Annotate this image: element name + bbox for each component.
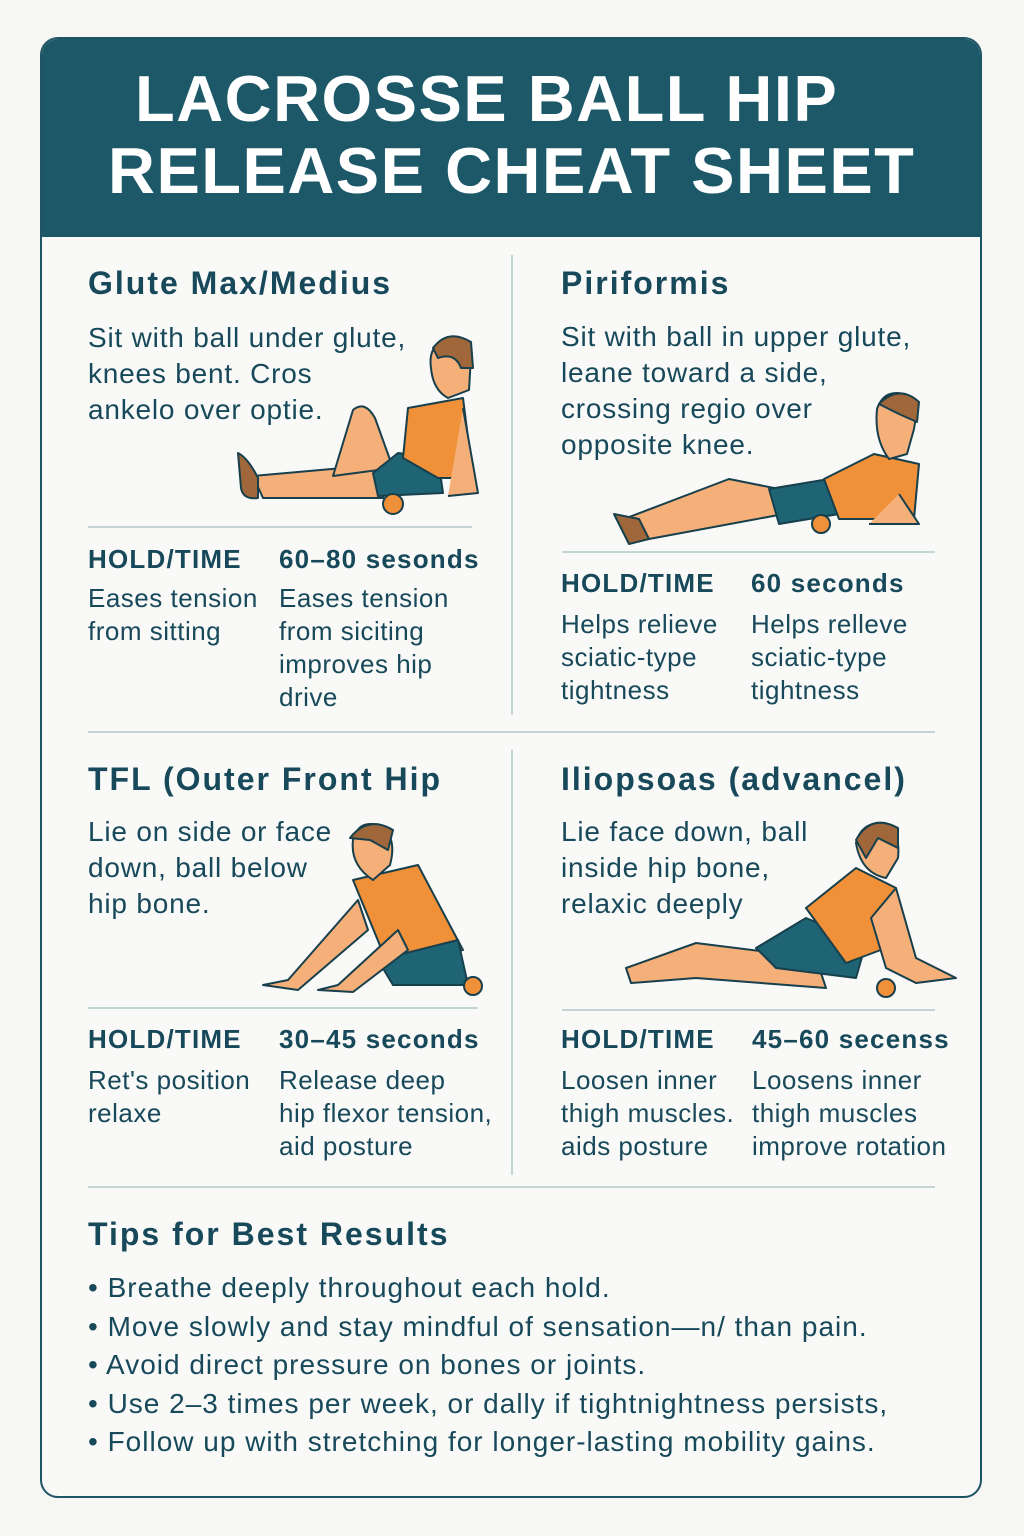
heading TFL: TFL (Outer Front Hip: [88, 761, 442, 797]
text glute: knees bent. Cros: [88, 358, 312, 389]
panel: TFL: Ret's position: [88, 1065, 250, 1095]
panel: glute: from sitting: [88, 616, 221, 646]
panel: piriformis: 60 seconds: [751, 568, 905, 598]
tips list: • Follow up with stretching for longer-lasting mobility gains.: [88, 1426, 876, 1457]
heading iliopsoas: Iliopsoas (advancel): [561, 761, 907, 797]
text piriformis: Sit with ball in upper glute,: [561, 321, 911, 352]
tips list: • Avoid direct pressure on bones or joints.: [88, 1349, 646, 1380]
icon: prone figure: [625, 822, 957, 998]
panel: piriformis: sciatic-type: [751, 642, 887, 672]
hold iliopsoas: HOLD/TIME: [561, 1024, 715, 1054]
panel: piriformis: tightness: [561, 675, 670, 705]
panel: iliopsoas: thigh muscles.: [561, 1098, 734, 1128]
tips heading: Tips for Best Results: [88, 1216, 449, 1252]
text piriformis: [561, 321, 911, 460]
icon: kneeling figure: [262, 823, 483, 996]
text piriformis: crossing regio over: [561, 393, 813, 424]
panel: glute: 60–80 sesonds: [279, 544, 480, 574]
panel: glute: [88, 265, 480, 712]
hold TFL: HOLD/TIME: [88, 1024, 242, 1054]
panel: piriformis: sciatic-type: [561, 642, 697, 672]
tips list: • Use 2–3 times per week, or dally if tightnightness persists,: [88, 1388, 888, 1418]
panel: iliopsoas: Loosen inner: [561, 1065, 717, 1095]
panel: iliopsoas: improve rotation: [752, 1131, 946, 1161]
panel: iliopsoas: 45–60 secenss: [752, 1024, 950, 1054]
panel: iliopsoas: [561, 761, 957, 1161]
panel: TFL: [88, 761, 492, 1161]
panel: TFL: relaxe: [88, 1098, 162, 1128]
title: RELEASE CHEAT SHEET: [108, 134, 915, 207]
panel: iliopsoas: thigh muscles: [752, 1098, 917, 1128]
text iliopsoas: relaxic deeply: [561, 888, 743, 919]
text TFL: [88, 816, 332, 919]
text TFL: hip bone.: [88, 888, 210, 919]
panel: piriformis: tightness: [751, 675, 860, 705]
panel: piriformis: Helps relieve: [561, 609, 718, 639]
panel: glute: improves hip: [279, 649, 432, 679]
panel: TFL: Release deep: [279, 1065, 445, 1095]
tips section: [88, 1216, 888, 1457]
panel: TFL: 30–45 seconds: [279, 1024, 480, 1054]
text iliopsoas: inside hip bone,: [561, 852, 770, 883]
tips list: • Breathe deeply throughout each hold.: [88, 1272, 611, 1303]
hold piriformis: HOLD/TIME: [561, 568, 715, 598]
icon: reclining figure: [613, 392, 920, 545]
text TFL: Lie on side or face: [88, 816, 332, 847]
panel: TFL: hip flexor tension,: [279, 1098, 492, 1128]
header banner: [42, 39, 980, 237]
text iliopsoas: [561, 816, 808, 919]
title: LACROSSE BALL HIP: [135, 62, 838, 135]
panel: glute: from siciting: [279, 616, 424, 646]
tips list: • Move slowly and stay mindful of sensation—n/ than pain.: [88, 1310, 868, 1342]
panel: piriformis: Helps relleve: [751, 609, 908, 639]
panel: TFL: aid posture: [279, 1131, 413, 1161]
hold glute: HOLD/TIME: [88, 544, 242, 574]
text glute: [88, 322, 406, 425]
text TFL: down, ball below: [88, 852, 308, 883]
icon: sitting figure: [237, 335, 479, 515]
text glute: ankelo over optie.: [88, 394, 323, 425]
text piriformis: leane toward a side,: [561, 357, 828, 388]
text glute: Sit with ball under glute,: [88, 322, 406, 353]
panel: glute: drive: [279, 682, 338, 712]
panel: glute: Eases tension: [88, 583, 258, 613]
heading piriformis: Piriformis: [561, 265, 730, 301]
text piriformis: opposite knee.: [561, 429, 754, 460]
heading glute: Glute Max/Medius: [88, 265, 392, 301]
panel: iliopsoas: Loosens inner: [752, 1065, 922, 1095]
panel: iliopsoas: aids posture: [561, 1131, 709, 1161]
panel: piriformis: [561, 265, 920, 705]
text iliopsoas: Lie face down, ball: [561, 816, 808, 847]
title: [108, 62, 915, 207]
tips list: [88, 1272, 888, 1457]
panel: glute: Eases tension: [279, 583, 449, 613]
